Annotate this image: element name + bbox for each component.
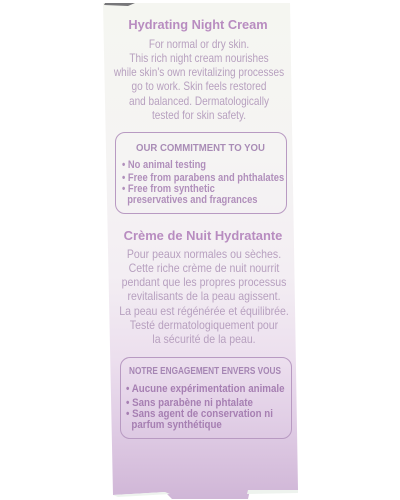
commitment list: • No animal testing [122, 159, 206, 171]
commitment list: • Free from synthetic [122, 183, 215, 195]
text block: French description: Testé dermatologiquement pour [129, 319, 278, 332]
text block: French description: La peau est régénérée et équilibrée. [119, 305, 288, 318]
text block: English description: go to work. Skin feels restored [132, 80, 266, 93]
engagement list [126, 383, 284, 430]
text block: French description: pendant que les propres processus [121, 276, 286, 289]
text block: French description: revitalisants de la peau agissent. [127, 290, 280, 303]
text block: English description: while skin's own revitalizing processes [114, 66, 284, 79]
engagement list: • Sans agent de conservation ni [126, 408, 273, 420]
text block: French description: Pour peaux normales ou sèches. [126, 248, 281, 260]
heading: Hydrating Night Cream: Hydrating Night Cream [128, 16, 268, 32]
heading: Crème de Nuit Hydratante: Crème de Nuit Hydratante [123, 228, 282, 242]
commitment list [122, 159, 284, 206]
engagement list: • Sans parabène ni phtalate [126, 397, 253, 409]
panel heading: NOTRE ENGAGEMENT ENVERS VOUS [129, 366, 281, 377]
text block: English description: and balanced. Dermatologically [129, 95, 269, 108]
panel: notre engagement envers vous [120, 357, 292, 439]
text block: French description [119, 248, 288, 346]
panel: our commitment to you [115, 132, 287, 214]
text block: English description: tested for skin safety. [152, 109, 246, 122]
engagement list: parfum synthétique [131, 418, 222, 430]
commitment list: • Free from parabens and phthalates [122, 172, 284, 184]
text block: English description: For normal or dry skin. [149, 38, 249, 50]
engagement list: • Aucune expérimentation animale [126, 383, 284, 395]
text block: English description: This rich night cream nourishes [129, 52, 269, 65]
text block: French description: la sécurité de la peau. [152, 333, 255, 346]
text block: French description: Cette riche crème de nuit nourrit [128, 262, 279, 275]
text block: English description [114, 38, 284, 122]
commitment list: preservatives and fragrances [127, 194, 258, 206]
panel heading: OUR COMMITMENT TO YOU [136, 143, 265, 154]
